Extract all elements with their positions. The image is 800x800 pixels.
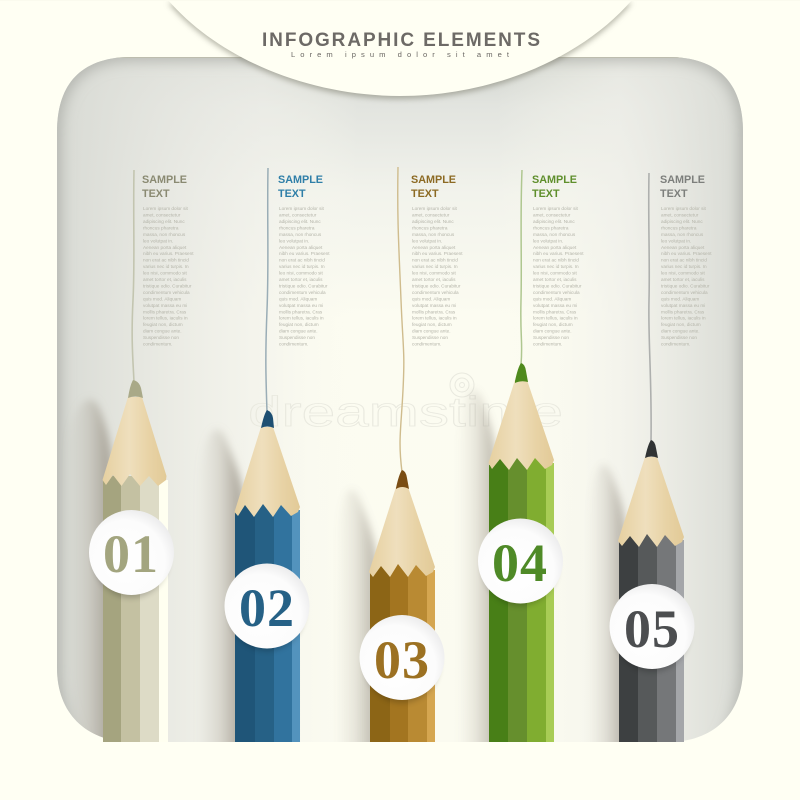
text column 2: leo nisi, commodo sit	[279, 271, 323, 276]
text column 3: amet, consectetur	[412, 212, 450, 218]
text column 2: tristique odio. Curabitur	[279, 284, 328, 288]
text column 1: SAMPLE	[142, 174, 187, 186]
text column 1: varius nec id turpis. In	[143, 264, 189, 269]
text column 4	[532, 174, 584, 346]
text column 3: condimentum.	[412, 342, 441, 346]
text column 3: leo volutpat in.	[412, 238, 442, 243]
text column 1: condimentum.	[143, 342, 172, 346]
number badge 03: 03	[374, 630, 430, 690]
pencil cast shadows	[66, 389, 628, 760]
text column 2: quis mod. Aliquam	[279, 296, 317, 301]
text column 3: varius nec id turpis. In	[412, 264, 458, 269]
text column 1: lorem tellus, iaculis in	[143, 316, 188, 321]
text column 5: condimentum.	[661, 342, 690, 346]
text column 2: SAMPLE	[278, 174, 323, 186]
text column 3: non erat ac nibh tincid	[412, 258, 458, 263]
text column 5: volutpat massa eu mi	[661, 303, 705, 308]
text column 5: mollis pharetra. Cras	[661, 309, 705, 314]
text column 5: Lorem ipsum dolor sit	[661, 206, 707, 211]
string 5	[649, 173, 651, 442]
text column 2: mollis pharetra. Cras	[279, 309, 323, 314]
text column 5: Aenean porta aliquet	[661, 245, 705, 250]
number badge 01	[89, 510, 174, 598]
text column 2: condimentum vehicula	[279, 290, 326, 295]
text column 5: non erat ac nibh tincid	[661, 258, 707, 263]
text column 4: mollis pharetra. Cras	[533, 309, 577, 314]
text column 4: varius nec id turpis. In	[533, 264, 579, 269]
text column 5: rhoncus pharetra	[661, 225, 697, 230]
number badge 03	[360, 615, 444, 703]
text column 5: feugiat non, dictum	[661, 322, 701, 327]
text column 4: amet tortor et, iaculis	[533, 277, 577, 282]
text column 1: massa, non rhoncus	[143, 232, 186, 237]
text column 4: tristique odio. Curabitur	[533, 284, 582, 288]
text column 3: amet tortor et, iaculis	[412, 277, 456, 282]
text column 2: amet tortor et, iaculis	[279, 277, 323, 282]
text column 3: adipiscing elit. Nunc	[412, 219, 454, 224]
text column 1: non erat ac nibh tincid	[143, 258, 189, 263]
text column 3: diam congue ante.	[412, 329, 451, 334]
text column 5: SAMPLE	[660, 174, 705, 186]
text column 4: Lorem ipsum dolor sit	[533, 206, 579, 211]
text column 1: leo nisi, commodo sit	[143, 271, 187, 276]
number badge 04	[478, 518, 563, 606]
text column 5: adipiscing elit. Nunc	[661, 219, 703, 224]
text column 2: condimentum.	[279, 342, 308, 346]
text column 4: SAMPLE	[532, 174, 577, 186]
number badge 02: 02	[239, 578, 295, 638]
title: INFOGRAPHIC ELEMENTS	[262, 30, 540, 51]
header tab with arc shadow	[0, 0, 800, 99]
text column 1: Aenean porta aliquet	[143, 245, 187, 250]
text column 3: SAMPLE	[411, 174, 456, 186]
text column 5: amet, consectetur	[661, 212, 699, 218]
panel: main rounded frame	[52, 52, 748, 785]
text column 3: TEXT	[411, 188, 439, 200]
subtitle: Lorem ipsum dolor sit amet	[291, 50, 510, 59]
text column 2: Suspendisse non	[279, 335, 315, 340]
text column 2	[278, 174, 330, 346]
text column 3: volutpat massa eu mi	[412, 303, 456, 308]
text column 2: TEXT	[278, 188, 306, 200]
text column 5: diam congue ante.	[661, 329, 700, 334]
text column 4: Suspendisse non	[533, 335, 569, 340]
text column 2: non erat ac nibh tincid	[279, 258, 325, 263]
text column 1: nibh eu varius. Praesent	[143, 251, 194, 256]
text column 2: nibh eu varius. Praesent	[279, 251, 330, 256]
string 3	[398, 167, 404, 472]
text column 3: lorem tellus, iaculis in	[412, 316, 457, 321]
text column 4: TEXT	[532, 188, 560, 200]
text column 4: condimentum.	[533, 342, 562, 346]
text column 5: quis mod. Aliquam	[661, 296, 699, 301]
text column 2: varius nec id turpis. In	[279, 264, 325, 269]
text column 3: Lorem ipsum dolor sit	[412, 206, 458, 211]
watermark	[250, 372, 561, 427]
text column 2: rhoncus pharetra	[279, 225, 315, 230]
text column 1: feugiat non, dictum	[143, 322, 183, 327]
text column 2: leo volutpat in.	[279, 238, 309, 243]
text column 1: Suspendisse non	[143, 335, 179, 340]
text column 1: volutpat massa eu mi	[143, 303, 187, 308]
text column 1: quis mod. Aliquam	[143, 296, 181, 301]
number badge 01: 01	[103, 524, 159, 584]
text column 5: TEXT	[660, 188, 688, 200]
text column 2: amet, consectetur	[279, 212, 317, 218]
text column 3: mollis pharetra. Cras	[412, 309, 456, 314]
text column 5: leo volutpat in.	[661, 238, 691, 243]
text column 5: amet tortor et, iaculis	[661, 277, 705, 282]
text column 2: Aenean porta aliquet	[279, 245, 323, 250]
text column 5: tristique odio. Curabitur	[661, 284, 710, 288]
text column 1: leo volutpat in.	[143, 238, 173, 243]
text column 1: TEXT	[142, 188, 170, 200]
text column 4: quis mod. Aliquam	[533, 296, 571, 301]
text column 2: adipiscing elit. Nunc	[279, 219, 321, 224]
text column 2: volutpat massa eu mi	[279, 303, 323, 308]
number badge 02	[224, 564, 310, 651]
pencil 1	[102, 380, 168, 742]
pencil 4	[488, 363, 554, 742]
text column 1: condimentum vehicula	[143, 290, 190, 295]
text column 3: Suspendisse non	[412, 335, 448, 340]
text column 1: diam congue ante.	[143, 329, 182, 334]
text column 1: mollis pharetra. Cras	[143, 309, 187, 314]
text column 5: condimentum vehicula	[661, 290, 708, 295]
text column 2: Lorem ipsum dolor sit	[279, 206, 325, 211]
text column 4: condimentum vehicula	[533, 290, 580, 295]
number badge 05	[610, 584, 694, 672]
text column 4: volutpat massa eu mi	[533, 303, 577, 308]
text column 2: massa, non rhoncus	[279, 232, 322, 237]
text column 5: varius nec id turpis. In	[661, 264, 707, 269]
string 1	[132, 170, 134, 382]
text column 4: massa, non rhoncus	[533, 232, 576, 237]
text column 4: nibh eu varius. Praesent	[533, 251, 584, 256]
text column 4: rhoncus pharetra	[533, 225, 569, 230]
string 4	[521, 170, 522, 365]
text column 3: feugiat non, dictum	[412, 322, 452, 327]
text column 4: feugiat non, dictum	[533, 322, 573, 327]
pencil 2	[234, 410, 300, 742]
watermark: dreamstime	[248, 388, 563, 435]
pencil 5	[618, 440, 684, 742]
text column 4: leo volutpat in.	[533, 238, 563, 243]
text column 3	[411, 174, 463, 346]
text column 1: rhoncus pharetra	[143, 225, 179, 230]
text column 4: leo nisi, commodo sit	[533, 271, 577, 276]
text column 3: leo nisi, commodo sit	[412, 271, 456, 276]
text column 4: non erat ac nibh tincid	[533, 258, 579, 263]
text column 4: Aenean porta aliquet	[533, 245, 577, 250]
text column 3: quis mod. Aliquam	[412, 296, 450, 301]
text column 5: lorem tellus, iaculis in	[661, 316, 706, 321]
number badge 05: 05	[624, 599, 680, 659]
text column 4: lorem tellus, iaculis in	[533, 316, 578, 321]
text column 1	[142, 174, 194, 346]
text column 3: rhoncus pharetra	[412, 225, 448, 230]
text column 2: lorem tellus, iaculis in	[279, 316, 324, 321]
text column 3: nibh eu varius. Praesent	[412, 251, 463, 256]
text column 3: condimentum vehicula	[412, 290, 459, 295]
string 2	[266, 168, 268, 412]
text column 1: tristique odio. Curabitur	[143, 284, 192, 288]
text column 1: amet tortor et, iaculis	[143, 277, 187, 282]
text column 4: adipiscing elit. Nunc	[533, 219, 575, 224]
text column 3: tristique odio. Curabitur	[412, 284, 461, 288]
number badge 04: 04	[492, 533, 548, 593]
text column 5	[660, 174, 712, 346]
text column 1: amet, consectetur	[143, 212, 181, 218]
text column 2: diam congue ante.	[279, 329, 318, 334]
text column 5: Suspendisse non	[661, 335, 697, 340]
text column 4: amet, consectetur	[533, 212, 571, 218]
text column 5: leo nisi, commodo sit	[661, 271, 705, 276]
text column 5: nibh eu varius. Praesent	[661, 251, 712, 256]
pencil 3	[369, 470, 435, 742]
text column 1: adipiscing elit. Nunc	[143, 219, 185, 224]
text column 1: Lorem ipsum dolor sit	[143, 206, 189, 211]
text column 4: diam congue ante.	[533, 329, 572, 334]
text column 3: massa, non rhoncus	[412, 232, 455, 237]
text column 5: massa, non rhoncus	[661, 232, 704, 237]
text column 2: feugiat non, dictum	[279, 322, 319, 327]
text column 3: Aenean porta aliquet	[412, 245, 456, 250]
